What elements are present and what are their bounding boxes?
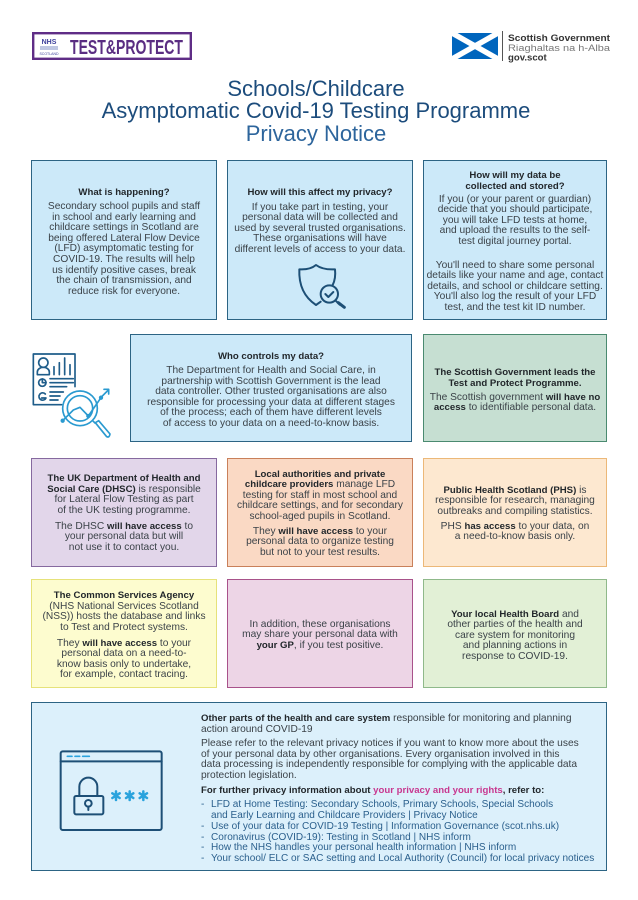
text: Scottish Government access: access to identifiable personal data. [434,402,596,413]
list: privacy links: - [201,799,204,810]
title: Schools/Childcare [227,76,405,101]
panel: DHSC [31,458,217,567]
text: local authorities role: school-aged pupils in Scotland. [249,511,391,522]
panel: share with GP [227,579,413,688]
text: privacy: These organisations will have [253,233,387,244]
text: what is happening: being offered Lateral Flow Device [48,233,200,244]
text: DHSC role: for Lateral Flow Testing as part [54,494,194,505]
icon: shield with magnifier [298,264,346,309]
text: PHS role: outbreaks and compiling statistics. [437,506,593,517]
text: details to share: You'll also log the result of your LFD [434,291,596,302]
panel: who controls my data [130,334,412,442]
text: local authorities access [246,526,394,558]
text: collected and stored: If you (or your parent or guardian) [439,194,591,204]
list: privacy links: How the NHS handles your personal health information | NHS inform [211,842,516,853]
text: local Health Board: and planning actions in [463,640,567,651]
heading: Scottish Government leads [434,367,596,389]
panel: what is happening [31,160,217,320]
text: DHSC role: The UK Department of Health and [48,473,200,484]
text: what is happening: COVID-19. The results will help [53,254,195,265]
list: privacy links: Coronavirus (COVID-19): Testing in Scotland | NHS inform [211,832,471,842]
list: privacy links: Use of your data for COVID-19 Testing | Information Governance (scot.nhs.uk) [211,820,559,832]
text: other parts intro: action around COVID-19 [201,724,313,735]
text: other parts intro [201,713,572,735]
heading: what is happening: What is happening? [78,187,170,198]
text: share with GP [242,618,398,651]
text: PHS role: responsible for research, managing [435,495,595,506]
text: CSA role: The Common Services Agency [54,590,194,601]
list: privacy links: and Early Learning and Childcare Providers | Privacy Notice [211,810,478,821]
text: DHSC access [55,520,193,553]
text: privacy [234,202,406,255]
text: details to share: details, and school or childcare setting. [427,281,603,292]
text: privacy: used by several trusted organisations. [234,223,406,234]
text: DHSC access: not use it to contact you. [69,542,179,553]
text: collected and stored: test digital journey portal. [458,236,572,247]
heading: collected and stored [465,170,565,192]
logo: Scottish Government: gov.scot [508,52,548,64]
text: DHSC role: of the UK testing programme. [57,505,191,516]
text: local Health Board: Your local Health Board and [451,608,579,620]
text: what is happening: in school and early learning and [52,212,196,223]
text: CSA access: for example, contact tracing. [60,669,188,680]
icon: browser window with padlock and password [60,750,163,831]
text: privacy: If you take part in testing, your [252,202,388,212]
text: privacy: personal data will be collected and [242,212,398,223]
panel: Public Health Scotland [423,458,607,567]
text: details to share: details like your name and age, contact [427,270,603,281]
text: PHS role [435,484,595,517]
text: share with GP: may share your personal data with [242,629,398,640]
text: local Health Board: response to COVID-19. [462,651,568,662]
text: DHSC access: your personal data but will [65,531,183,542]
heading: who controls my data: Who controls my data? [218,351,324,362]
text: DHSC role [47,473,201,516]
panel: other parts of the health and care system [31,702,607,871]
title: Asymptomatic Covid-19 Testing Programme [102,98,530,123]
panel: Scottish Government leads [423,334,607,442]
list: privacy links [201,799,594,864]
heading: Scottish Government leads: Test and Protect Programme. [448,378,582,389]
text: what is happening: reduce risk for everyone. [68,286,180,297]
text: local authorities role: childcare settings, and for secondary [237,500,403,511]
text: details to share [427,260,604,313]
text: what is happening: childcare settings in Scotland are [49,222,199,233]
heading: Scottish Government leads: The Scottish Government leads the [434,367,596,378]
text: other parts intro: Other parts of the health and care system responsible for monitoring and planning [201,713,572,724]
panel: how will this affect my privacy [227,160,413,320]
panel: Common Services Agency [31,579,217,688]
text: who controls my data: data controller. Other trusted organisations are also [155,386,387,397]
logo: NHS Test and Protect [32,32,192,60]
logo: Scottish Government [452,31,611,64]
text: local authorities role: Local authorities and private [255,468,385,480]
text: CSA role: (NHS National Services Scotland [49,601,199,612]
text: refer to privacy notices: of your personal data by other organisations. Every organisation involved in this [201,749,559,760]
logo: NHS Test and Protect: NHS [42,39,57,46]
text: PHS access: a need-to-know basis only. [455,531,575,542]
text: refer to privacy notices: protection legislation. [201,770,297,781]
text: CSA access [57,638,191,680]
list: privacy links: - [201,820,204,832]
text: Scottish Government access [430,392,600,413]
text: PHS access: PHS has access to your data, on [441,520,589,532]
text: local authorities access: They will have access to your [253,526,387,536]
heading: collected and stored: How will my data be [469,170,561,181]
list: privacy links: - [201,852,204,864]
panel: local authorities [227,458,413,567]
text: local authorities access: personal data to organize testing [246,536,394,547]
text: privacy: different levels of access to your data. [235,244,405,255]
text: what is happening [48,201,200,297]
logo: Scottish Government: Scottish Government [508,33,611,44]
text: local authorities role: testing for staff in most school and [243,490,397,501]
heading: privacy: How will this affect my privacy? [247,187,392,198]
text: local authorities role: childcare providers manage LFD [245,479,395,490]
icon: document with magnifier and chart [32,353,111,438]
text: local authorities access: but not to your test results. [260,547,380,558]
logo: NHS Test and Protect: SCOTLAND [39,52,59,56]
text: what is happening: (LFD) asymptomatic testing for [54,243,194,254]
text: local Health Board [447,608,583,662]
panel: local Health Board [423,579,607,688]
text: what is happening: Secondary school pupils and staff [48,201,200,212]
list: privacy links: LFD at Home Testing: Secondary Schools, Primary Schools, Special Schools [211,799,553,810]
text: what is happening: the chain of transmission, and [56,275,192,286]
text: share with GP: In addition, these organisations [249,618,391,630]
text: details to share: You'll need to share some personal [436,260,594,270]
text: details to share: test, and the test kit ID number. [444,302,586,313]
text: CSA access: know basis only to undertake, [57,659,191,670]
list: privacy links: - [201,842,204,853]
text: PHS role: Public Health Scotland (PHS) is [444,484,586,496]
text: share with GP: your GP, if you test positive. [257,640,383,651]
text: CSA role: to Test and Protect systems. [60,622,188,633]
text: Scottish Government access: The Scottish government will have no [430,392,600,402]
text: who controls my data [147,365,395,429]
text: who controls my data: of the process; each of them have different levels [160,407,382,418]
text: who controls my data: The Department for Health and Social Care, in [166,365,376,376]
text: CSA access: They will have access to your [57,638,191,648]
list: privacy links: - [201,832,204,842]
text: refer to privacy notices: Please refer to the relevant privacy notices if you want to know more about the uses [201,738,579,749]
logo: Scottish Government: Riaghaltas na h-Alba [508,43,611,54]
text: refer to privacy notices: data processing is independently responsible for complying with the applicable data [201,759,577,770]
text: collected and stored: decide that you should participate, [438,204,592,215]
text: local Health Board: other parties of the health and [447,619,583,630]
panel: how will my data be collected and stored [423,160,607,320]
text: CSA role [42,590,206,633]
text: CSA access: personal data on a need-to- [61,648,187,659]
text: DHSC access: The DHSC will have access to [55,520,193,532]
text: PHS access [441,520,589,542]
text: what is happening: us identify positive cases, break [52,265,196,276]
text: who controls my data: responsible for processing your data at different stages [147,397,395,408]
text: CSA role: (NSS)) hosts the database and links [42,611,206,622]
text: who controls my data: of access to your data on a need-to-know basis. [163,418,379,429]
text: DHSC role: Social Care (DHSC) is responsible [47,484,201,495]
title [102,76,530,146]
text: further privacy information: For further privacy information about your privacy and your rights, refer to: [201,785,544,796]
title: Privacy Notice [246,121,386,146]
text: refer to privacy notices [201,738,579,781]
list: privacy links: Your school/ ELC or SAC setting and Local Authority (Council) for local privacy notices [211,852,594,864]
text: collected and stored: and upload the results to the self- [440,225,590,236]
text: local authorities role [237,468,403,522]
text: collected and stored: you will take LFD tests at home, [443,215,587,226]
heading: collected and stored: collected and stored? [465,181,565,192]
text: who controls my data: partnership with Scottish Government is the lead [161,376,381,387]
text: local Health Board: care system for monitoring [455,630,575,641]
text: collected and stored [438,194,592,247]
